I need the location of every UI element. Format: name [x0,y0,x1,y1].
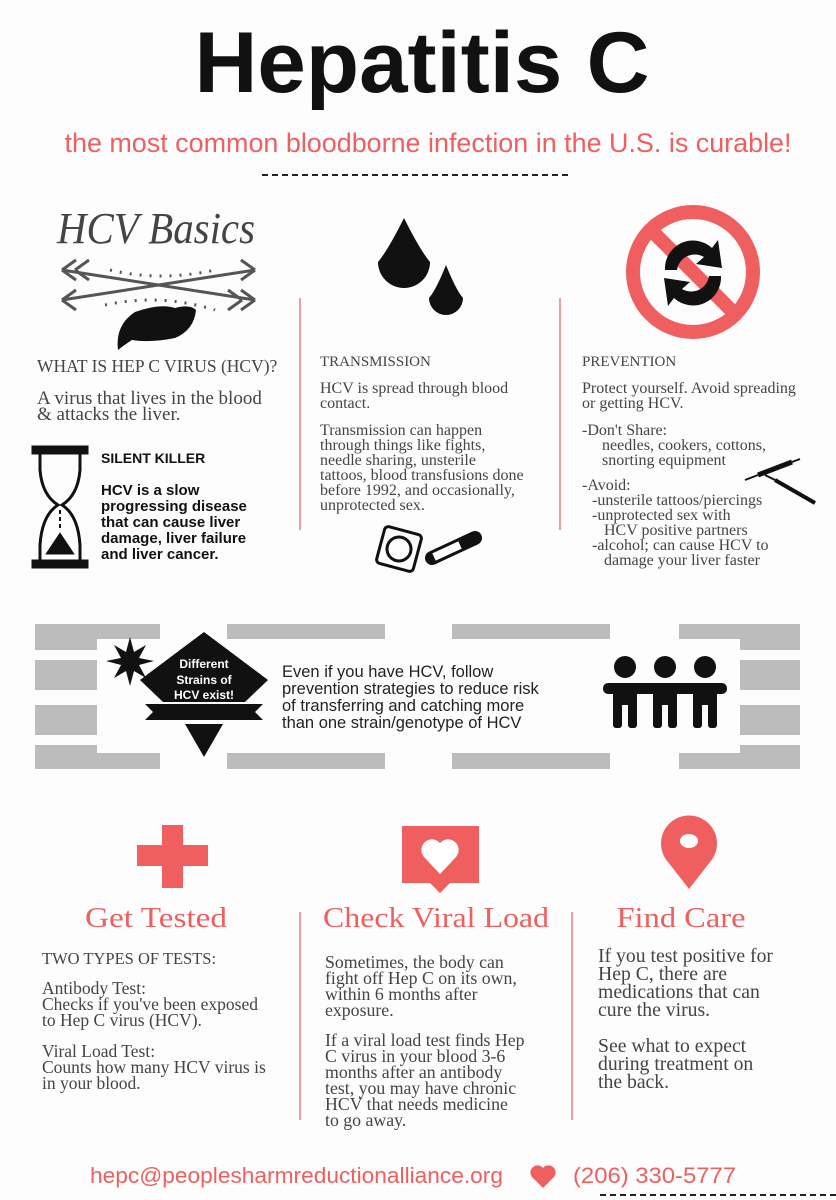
panel: prevention: HCV positive partners [604,522,748,539]
panel: find care text: during treatment on [598,1053,753,1075]
panel: prevention: -Avoid: [582,477,631,494]
panel: prevention: needles, cookers, cottons, [602,437,766,454]
panel: prevention [582,354,796,569]
panel: viral load text: months after an antibody [325,1062,502,1082]
panel: find care text: medications that can [598,981,760,1003]
icon: no sharing sign [633,212,753,332]
icon: blood drops [378,218,463,315]
text: prevention strategies: of transferring and catching more [282,697,524,715]
text: prevention strategies [282,663,540,732]
panel: tests text [42,949,266,1093]
title: Hepatitis C [194,15,650,111]
panel: viral load text: within 6 months after [325,984,478,1004]
text: silent killer: HCV is a slow [101,482,200,499]
panel: transmission: HCV is spread through blood [320,380,508,397]
panel: viral load text: test, you may have chronic [325,1078,516,1098]
panel: prevention: Protect yourself. Avoid spreading [582,380,796,397]
panel: tests text: TWO TYPES OF TESTS: [42,949,216,968]
panel: viral load text [325,952,525,1130]
icon: syringe [745,459,815,503]
panel: find care text: the back. [598,1071,669,1093]
panel: viral load text: C virus in your blood 3-6 [325,1046,505,1066]
icon: arrows and liver [62,260,255,350]
heading: find care: Find Care [616,903,746,934]
panel: HCV basics [37,204,278,425]
panel: prevention: -unsterile tattoos/piercings [592,492,762,509]
panel: transmission: needle sharing, unsterile [320,452,476,469]
panel: transmission: Transmission can happen [320,422,482,439]
panel: viral load text: HCV that needs medicine [325,1094,508,1114]
heading: HCV Basics: HCV Basics [56,204,255,253]
icon: map pin [661,815,717,889]
icon: condom and pipe [376,526,475,572]
panel: prevention: -alcohol; can cause HCV to [592,537,769,554]
panel: viral load text: to go away. [325,1110,406,1130]
panel: viral load text: If a viral load test finds Hep [325,1030,525,1050]
panel: find care text [598,945,773,1093]
panel: prevention: -Don't Share: [582,422,667,439]
text: prevention strategies: prevention strategies to reduce risk [282,680,540,698]
text: silent killer: progressing disease [101,498,247,515]
heading: get tested: Get Tested [85,903,227,934]
badge: different strains: Strains of [176,673,233,687]
panel: find care text: If you test positive for [598,945,773,967]
panel: viral load text: fight off Hep C on its own, [325,968,517,988]
badge: different strains: HCV exist! [174,688,234,702]
panel: prevention: PREVENTION [582,354,676,370]
panel: find care text: Hep C, there are [598,963,727,985]
text: silent killer: and liver cancer. [101,546,219,563]
subtitle: the most common bloodborne infection in the U.S. is curable! [64,128,792,158]
panel: tests text: Viral Load Test: [42,1041,155,1061]
footer: contact: hepc@peoplesharmreductionalliance.org [90,1163,503,1188]
text: prevention strategies: than one strain/genotype of HCV [282,714,521,732]
banner: strains [35,624,800,769]
panel: HCV basics: & attacks the liver. [37,404,181,425]
panel: find care text: cure the virus. [598,999,710,1021]
panel: tests text: Checks if you've been exposed [42,994,258,1014]
footer: contact [90,1163,736,1188]
panel: prevention: damage your liver faster [604,552,761,569]
badge: different strains [140,632,268,757]
panel: tests text: in your blood. [42,1073,141,1093]
panel: transmission: contact. [320,395,370,412]
panel: viral load text: exposure. [325,1000,394,1020]
text: silent killer: damage, liver failure [101,530,246,547]
panel: tests text: Antibody Test: [42,978,146,998]
panel: transmission: through things like fights, [320,437,485,454]
panel: find care text: See what to expect [598,1035,747,1057]
badge: different strains: Different [179,657,229,671]
text: silent killer: that can cause liver [101,514,240,531]
text: prevention strategies: Even if you have HCV, follow [282,663,493,681]
footer: contact: (206) 330-5777 [573,1163,736,1188]
panel: transmission: before 1992, and occasionally, [320,482,515,499]
panel: tests text: to Hep C virus (HCV). [42,1010,202,1030]
panel: HCV basics: A virus that lives in the blood [37,388,262,409]
panel: tests text: Counts how many HCV virus is [42,1057,266,1077]
icon: heart message [402,826,479,893]
panel: prevention: snorting equipment [602,452,727,469]
panel: transmission: TRANSMISSION [320,354,431,370]
icon: star [106,637,154,686]
icon: plus [137,825,208,888]
panel: transmission [320,354,524,514]
icon: hourglass [33,447,87,567]
panel: prevention: -unprotected sex with [592,507,731,524]
panel: transmission: unprotected sex. [320,497,425,514]
icon: people [603,656,727,728]
panel: HCV basics: WHAT IS HEP C VIRUS (HCV)? [37,356,278,376]
heading: check viral load: Check Viral Load [323,903,549,934]
panel: transmission: tattoos, blood transfusions done [320,467,524,484]
text: silent killer [101,450,247,563]
panel: prevention: or getting HCV. [582,395,683,412]
text: silent killer: SILENT KILLER [101,450,205,466]
panel: viral load text: Sometimes, the body can [325,952,504,972]
